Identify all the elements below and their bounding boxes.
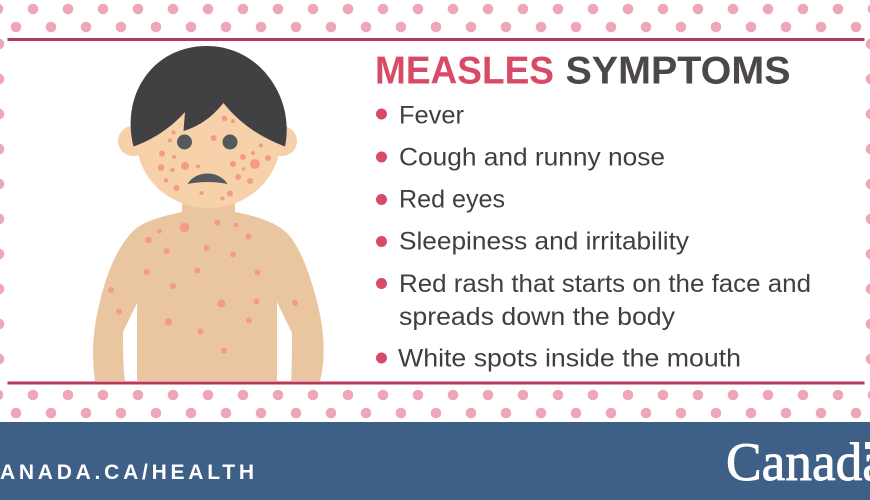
eyes: [177, 134, 192, 150]
footer band: [0, 422, 870, 500]
polka dot border: top: [0, 0, 870, 36]
face: [136, 72, 280, 208]
hair: [131, 46, 287, 146]
title: MEASLES: [375, 50, 554, 92]
symptom: rash: [376, 270, 811, 331]
polka dot border: left column: [0, 39, 4, 364]
illustration: child with measles rash: [93, 46, 324, 381]
mouth: [188, 174, 228, 184]
ears: [118, 126, 148, 156]
polka dot border: bottom: [0, 386, 870, 422]
symptom: white spots: White spots inside the mouth: [398, 344, 741, 372]
symptom: fever: Fever: [399, 102, 464, 130]
symptom: sleepiness: Sleepiness and irritability: [399, 228, 690, 256]
body with rash: [93, 200, 324, 381]
symptom: rash: spreads down the body: [399, 303, 676, 331]
symptom: rash: Red rash that starts on the face and: [399, 270, 811, 298]
symptom: cough: Cough and runny nose: [399, 144, 665, 172]
top rule: [8, 38, 864, 41]
title: [375, 50, 790, 92]
polka dot border: right column: [866, 39, 870, 364]
symptom: red eyes: Red eyes: [399, 186, 505, 214]
bottom rule: [8, 382, 864, 384]
symptom list: [376, 102, 811, 372]
title: SYMPTOMS: [566, 50, 790, 92]
facial rash: [158, 116, 271, 200]
